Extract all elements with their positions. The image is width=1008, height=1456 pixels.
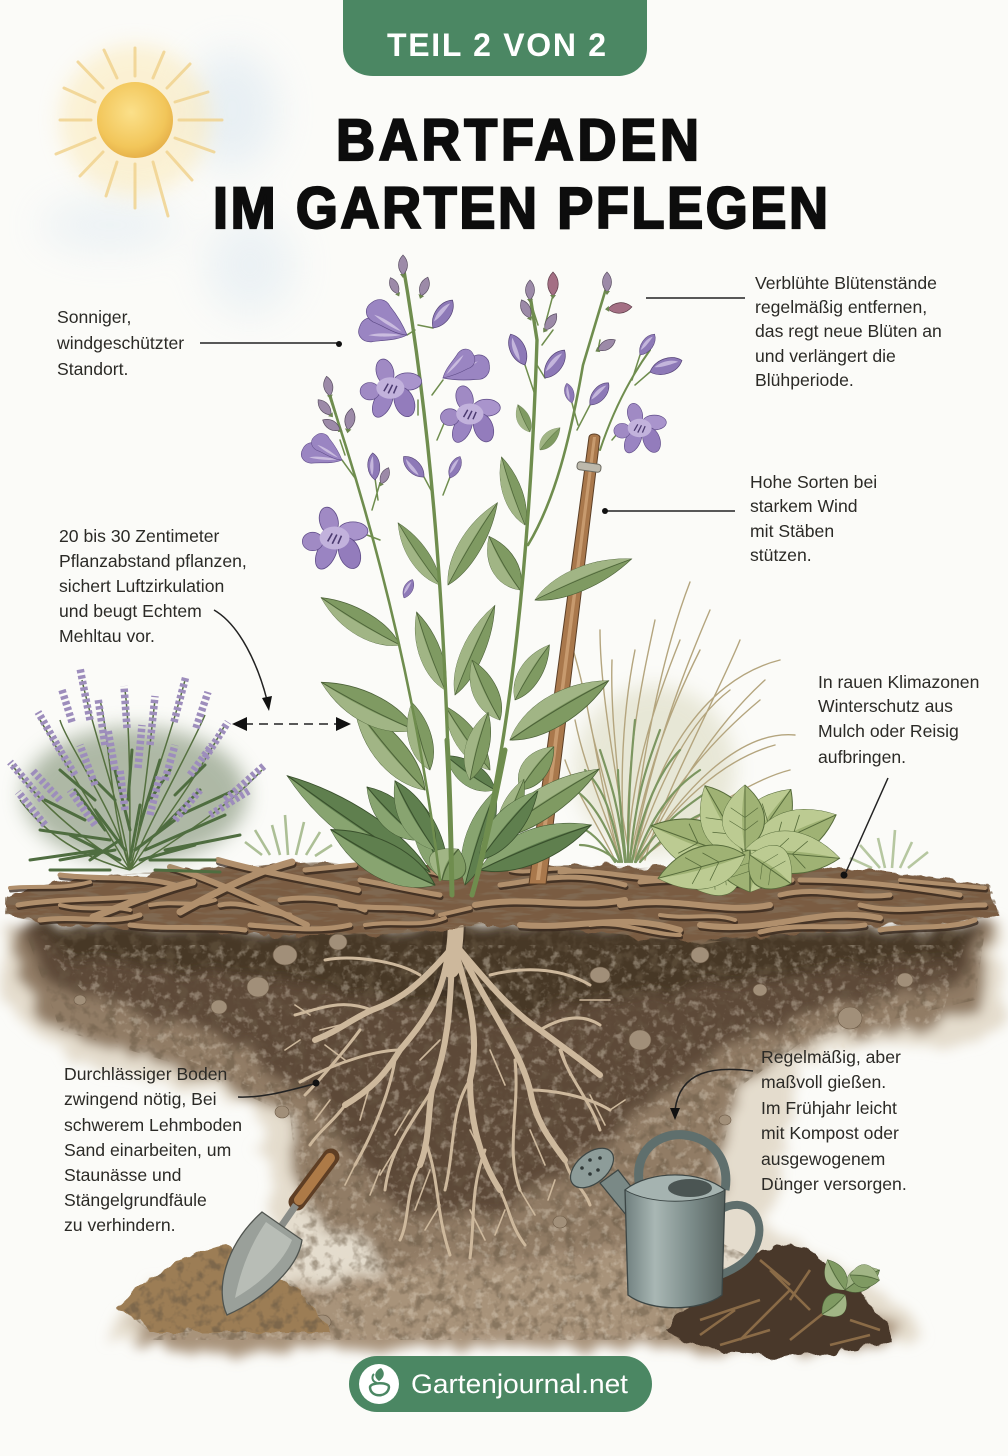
label: Pflanzabstand: sichert Luftzirkulation (59, 576, 224, 596)
label: Boden (64, 1064, 242, 1235)
label: Pflanzabstand: und beugt Echtem (59, 601, 202, 621)
mulch layer (5, 860, 1000, 945)
plant: stems (326, 265, 650, 895)
label: Boden: Stängelgrundfäule (64, 1190, 207, 1210)
label: Standort (56, 307, 184, 379)
label: Boden: zu verhindern. (64, 1215, 176, 1235)
label: Blütenstände: das regt neue Blüten an (755, 321, 942, 341)
leader: Standort (200, 341, 342, 347)
title (213, 107, 828, 240)
hosta plant (642, 775, 845, 909)
label: Gießen: Regelmäßig, aber (761, 1047, 901, 1067)
label: Pflanzabstand: 20 bis 30 Zentimeter (59, 526, 220, 546)
label: Boden: Staunässe und (64, 1165, 181, 1185)
label: Gießen: maßvoll gießen. (761, 1072, 886, 1092)
compost pile right (665, 1243, 892, 1356)
label: Winterschutz: In rauen Klimazonen (818, 672, 979, 692)
arrow: Pflanzabstand (214, 610, 272, 711)
arrow: Gießen (670, 1069, 753, 1120)
support stake (529, 434, 601, 884)
label: Stäbe: stützen. (750, 545, 812, 565)
small grass tuft right (850, 830, 928, 868)
banner: Teil 2 von 2 (343, 0, 647, 76)
label: Gießen: ausgewogenem (761, 1149, 885, 1169)
label: Pflanzabstand (59, 526, 247, 646)
label: Blütenstände: Blühperiode. (755, 370, 854, 390)
leader: Stäbe (602, 508, 735, 514)
label: Winterschutz: aufbringen. (818, 747, 906, 767)
label: Standort: Standort. (57, 359, 128, 379)
ornamental grass (565, 582, 795, 862)
small grass tuft left (245, 815, 332, 856)
label: Gießen (761, 1047, 907, 1194)
label: Boden: Durchlässiger Boden (64, 1064, 227, 1084)
icon: seedling on compost (816, 1255, 885, 1324)
banner: Teil 2 von 2: TEIL 2 VON 2 (387, 27, 606, 63)
label: Pflanzabstand: Mehltau vor. (59, 626, 155, 646)
footer badge (349, 1356, 652, 1412)
leader: Blütenstände (646, 297, 745, 299)
icon: trowel (222, 1157, 331, 1315)
label: Stäbe: Hohe Sorten bei (750, 472, 877, 492)
title: IM GARTEN PFLEGEN (213, 175, 828, 240)
stones in soil (74, 934, 913, 1329)
leader: Winterschutz (840, 778, 888, 878)
label: Winterschutz: Winterschutz aus (818, 696, 953, 716)
label: Boden: Sand einarbeiten, um (64, 1140, 231, 1160)
icon: watering can (563, 1135, 759, 1308)
label: Gießen: Dünger versorgen. (761, 1174, 907, 1194)
arrow: spacing dashed (232, 717, 351, 731)
compost pile left (118, 1245, 330, 1332)
icon: logo (359, 1364, 399, 1404)
label: Gießen: Im Frühjahr leicht (761, 1098, 897, 1118)
label: Blütenstände: regelmäßig entfernen, (755, 297, 927, 317)
lavender plant (10, 668, 265, 872)
title: BARTFADEN (336, 107, 699, 172)
plant: flowers and buds (299, 255, 685, 600)
label: Blütenstände: Verblühte Blütenstände (755, 273, 937, 293)
label: Gießen: mit Kompost oder (761, 1123, 899, 1143)
soil cross-section (0, 925, 1003, 1348)
label: Winterschutz: Mulch oder Reisig (818, 721, 959, 741)
icon: sun (56, 45, 222, 216)
leader: Boden (238, 1080, 320, 1097)
label: Standort: Sonniger, (57, 307, 131, 327)
label: Stäbe: starkem Wind (750, 496, 858, 516)
roots (285, 905, 625, 1258)
footer badge: Gartenjournal.net (411, 1369, 629, 1399)
plant: leaves (277, 402, 636, 903)
label: Stäbe: mit Stäben (750, 521, 834, 541)
label: Boden: zwingend nötig, Bei (64, 1089, 217, 1109)
label: Boden: schwerem Lehmboden (64, 1115, 242, 1135)
watercolor sky wash (40, 50, 295, 315)
label: Blütenstände (755, 273, 942, 390)
label: Blütenstände: und verlängert die (755, 346, 896, 366)
label: Winterschutz (818, 672, 979, 767)
label: Standort: windgeschützter (56, 333, 184, 353)
label: Pflanzabstand: Pflanzabstand pflanzen, (59, 551, 247, 571)
label: Stäbe (750, 472, 877, 565)
